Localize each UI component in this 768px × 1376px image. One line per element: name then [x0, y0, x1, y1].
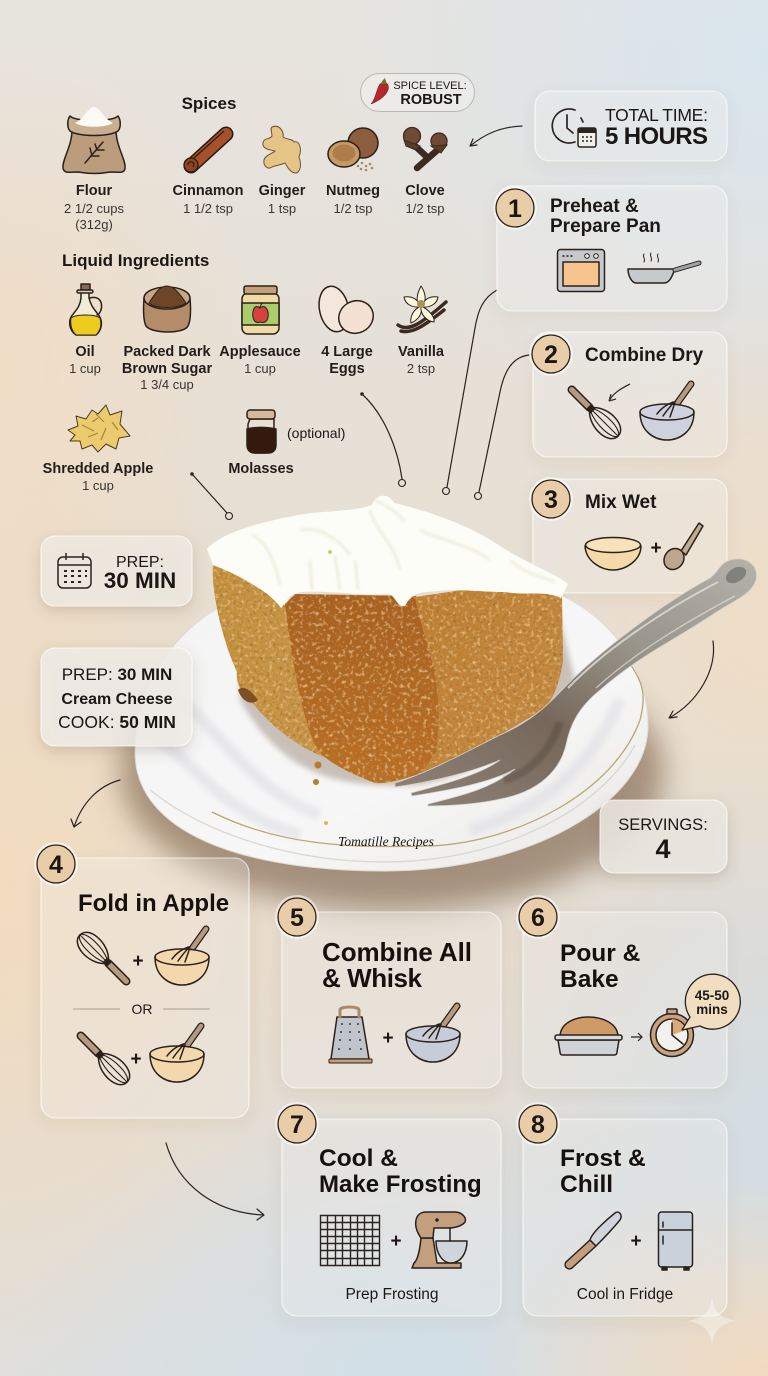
title: step 5	[322, 937, 472, 993]
title: step 5: Combine All	[322, 937, 472, 967]
icon: fridge	[658, 1212, 692, 1270]
arrow: to step 4	[71, 780, 120, 827]
crumbs	[238, 688, 328, 825]
title: step 8: Frost &	[560, 1145, 646, 1172]
ingredient: eggs: Eggs	[329, 361, 365, 377]
icon: bowl	[155, 929, 209, 985]
ingredient: oil: 1 cup	[69, 361, 101, 376]
ingredient: flour: 2 1/2 cups	[64, 201, 124, 216]
ingredient: oil: Oil	[75, 344, 95, 360]
or divider	[73, 1001, 210, 1017]
ingredient: flour: (312g)	[75, 217, 113, 232]
cake shadow	[240, 620, 575, 786]
panel: step 3	[533, 479, 727, 593]
fork	[395, 559, 757, 806]
watermark: Tomatille Recipes	[338, 834, 434, 849]
ingredient: clove	[404, 128, 447, 216]
title: step 1: Preheat &	[550, 196, 639, 217]
ingredient: vanilla: 2 tsp	[407, 361, 435, 376]
callout: 45-50 mins: 45-50	[695, 988, 729, 1003]
cake bitten middle	[285, 594, 440, 783]
frosting	[207, 496, 568, 608]
ingredient: applesauce: 1 cup	[244, 361, 276, 376]
ingredient: molasses: (optional)	[287, 425, 345, 441]
ingredient: applesauce: Applesauce	[219, 344, 301, 360]
callout: 45-50 mins: mins	[696, 1002, 728, 1017]
title: step 5: & Whisk	[322, 963, 423, 993]
callout: 45-50 mins	[682, 974, 740, 1030]
badge 2: 2	[544, 341, 558, 369]
badge 6	[516, 895, 560, 939]
panel: prep and cook: Cream Cheese	[61, 691, 173, 708]
icon: bowl	[150, 1026, 204, 1082]
icon: cooling rack	[320, 1216, 380, 1266]
title: step 4: Fold in Apple	[78, 890, 229, 917]
plus sign: +	[130, 1049, 142, 1070]
arrow: step 4 to step 7	[166, 1143, 264, 1220]
badge 4	[34, 842, 78, 886]
badge 7	[275, 1102, 319, 1146]
cake right face	[415, 586, 563, 774]
badge 1	[493, 186, 537, 230]
panel: servings: 4	[655, 834, 671, 864]
ingredient: vanilla	[398, 286, 446, 376]
ingredient: shredded apple: 1 cup	[82, 478, 114, 493]
ingredient: ginger	[259, 126, 306, 216]
ingredient: nutmeg: 1/2 tsp	[333, 201, 373, 216]
panel: step 1	[497, 186, 727, 311]
icon: grater	[329, 1007, 372, 1063]
badge 6: 6	[531, 904, 545, 932]
ingredient: brown sugar: 1 3/4 cup	[140, 377, 194, 392]
leader: step 1 to cake	[442, 290, 497, 494]
ingredient: oil	[69, 284, 102, 376]
arrow: step 3 to servings	[669, 641, 714, 718]
badge 4: 4	[49, 851, 63, 879]
plus sign: +	[390, 1231, 402, 1252]
ingredient: clove: 1/2 tsp	[405, 201, 445, 216]
ingredient: ginger: Ginger	[259, 183, 306, 199]
ingredient: eggs: 4 Large	[321, 344, 373, 360]
icon: stand mixer	[412, 1212, 467, 1268]
leader: step 2 to cake	[474, 355, 529, 500]
prep text	[104, 554, 176, 593]
icon: loaf pan	[555, 1017, 622, 1055]
badge 5	[275, 895, 319, 939]
cake slice	[207, 496, 575, 825]
ingredient: shredded apple	[43, 405, 153, 493]
ingredient: brown sugar: Brown Sugar	[122, 361, 212, 377]
ingredient: brown sugar: Packed Dark	[123, 344, 211, 360]
icon: whisk	[72, 927, 136, 991]
icon: pan	[628, 253, 699, 283]
panel: prep and cook	[41, 648, 192, 746]
panel: step 8	[523, 1119, 727, 1316]
total time text: TOTAL TIME:	[605, 105, 708, 125]
ingredient: molasses	[228, 410, 345, 477]
icon: small arrow	[609, 384, 630, 401]
ingredient: clove: Clove	[405, 183, 445, 199]
title: step 6	[560, 940, 640, 993]
title: step 8	[560, 1145, 646, 1198]
icon: oven	[558, 250, 604, 292]
or divider: OR	[132, 1001, 152, 1017]
icon: spatula	[565, 1212, 621, 1269]
title: step 3: Mix Wet	[585, 492, 657, 513]
panel: step 5	[282, 912, 501, 1088]
ingredient: nutmeg: Nutmeg	[326, 183, 380, 199]
caption: cool in fridge: Cool in Fridge	[577, 1286, 673, 1303]
heading: spices: Spices	[182, 94, 236, 113]
ingredient: shredded apple: Shredded Apple	[43, 461, 153, 477]
title: step 1: Prepare Pan	[550, 216, 661, 237]
panel: prep time	[41, 536, 192, 606]
ingredient: flour	[63, 107, 125, 232]
icon: whisk	[71, 1026, 135, 1090]
caption: prep frosting: Prep Frosting	[345, 1286, 439, 1303]
panel: servings: SERVINGS:	[618, 816, 708, 834]
heading: liquid ingredients: Liquid Ingredients	[62, 251, 209, 270]
arrow: to timer	[631, 1033, 642, 1041]
plate shadow	[120, 634, 664, 910]
badge 3	[529, 477, 573, 521]
spice level badge	[360, 74, 474, 112]
ingredient: applesauce	[219, 286, 301, 376]
spice level badge: SPICE LEVEL:	[393, 80, 467, 92]
title: step 8: Chill	[560, 1171, 613, 1198]
icon: stopwatch	[650, 1009, 694, 1056]
icon: bowl	[406, 1006, 460, 1062]
panel: step 4	[41, 858, 249, 1118]
plus sign: +	[650, 538, 662, 559]
panel: step 6	[523, 912, 740, 1088]
icon: bowl	[585, 538, 641, 570]
icon: chili	[371, 78, 388, 104]
badge 1: 1	[508, 195, 522, 223]
badge 8: 8	[531, 1111, 545, 1139]
ingredient: eggs	[315, 283, 379, 377]
arrow: total time to spices	[470, 126, 522, 146]
plus sign: +	[382, 1028, 394, 1049]
title: step 7: Cool &	[319, 1145, 398, 1172]
ingredient: molasses: Molasses	[228, 461, 294, 477]
icon: spoon	[660, 523, 703, 573]
title: step 7	[319, 1145, 482, 1198]
ingredient: ginger: 1 tsp	[268, 201, 296, 216]
ingredient: cinnamon: 1 1/2 tsp	[183, 201, 233, 216]
panel: prep and cook: COOK: 50 MIN	[58, 712, 176, 732]
spice level badge: ROBUST	[400, 92, 462, 108]
badge 5: 5	[290, 904, 304, 932]
title: step 7: Make Frosting	[319, 1171, 482, 1198]
title: step 1	[550, 196, 661, 237]
ingredient: nutmeg	[326, 128, 380, 216]
badge 2	[529, 332, 573, 376]
cake left face	[213, 565, 342, 763]
title: step 2: Combine Dry	[585, 345, 704, 366]
title: step 6: Pour &	[560, 940, 640, 967]
badge 3: 3	[544, 486, 558, 514]
ingredient: brown sugar	[122, 286, 212, 392]
panel: prep and cook: PREP: 30 MIN	[62, 665, 172, 684]
panel: servings	[600, 800, 727, 873]
panel: step 2	[533, 332, 727, 457]
total time text: 5 HOURS	[605, 123, 708, 150]
total time text	[605, 105, 708, 150]
badge 8	[516, 1102, 560, 1146]
plus sign: +	[630, 1231, 642, 1252]
ingredient: vanilla: Vanilla	[398, 344, 445, 360]
ingredient: flour: Flour	[76, 183, 112, 199]
plus sign: +	[132, 951, 144, 972]
prep text: PREP:	[116, 554, 164, 571]
badge 7: 7	[290, 1111, 304, 1139]
icon: whisk	[562, 380, 626, 444]
title: step 6: Bake	[560, 966, 619, 993]
icon: calendar	[58, 553, 91, 588]
leader: eggs to cake	[360, 392, 406, 486]
ingredient: cinnamon	[173, 131, 243, 216]
icon: mixing bowl	[640, 384, 694, 440]
leader: shredded apple to cake	[190, 472, 232, 520]
icon: clock and calendar	[552, 109, 596, 147]
plate	[135, 596, 648, 871]
prep text: 30 MIN	[104, 568, 176, 593]
panel: total time	[535, 91, 727, 161]
ingredient: cinnamon: Cinnamon	[173, 183, 243, 199]
panel: step 7	[282, 1119, 501, 1316]
frosting texture	[252, 500, 555, 590]
sparkle	[688, 1296, 736, 1345]
